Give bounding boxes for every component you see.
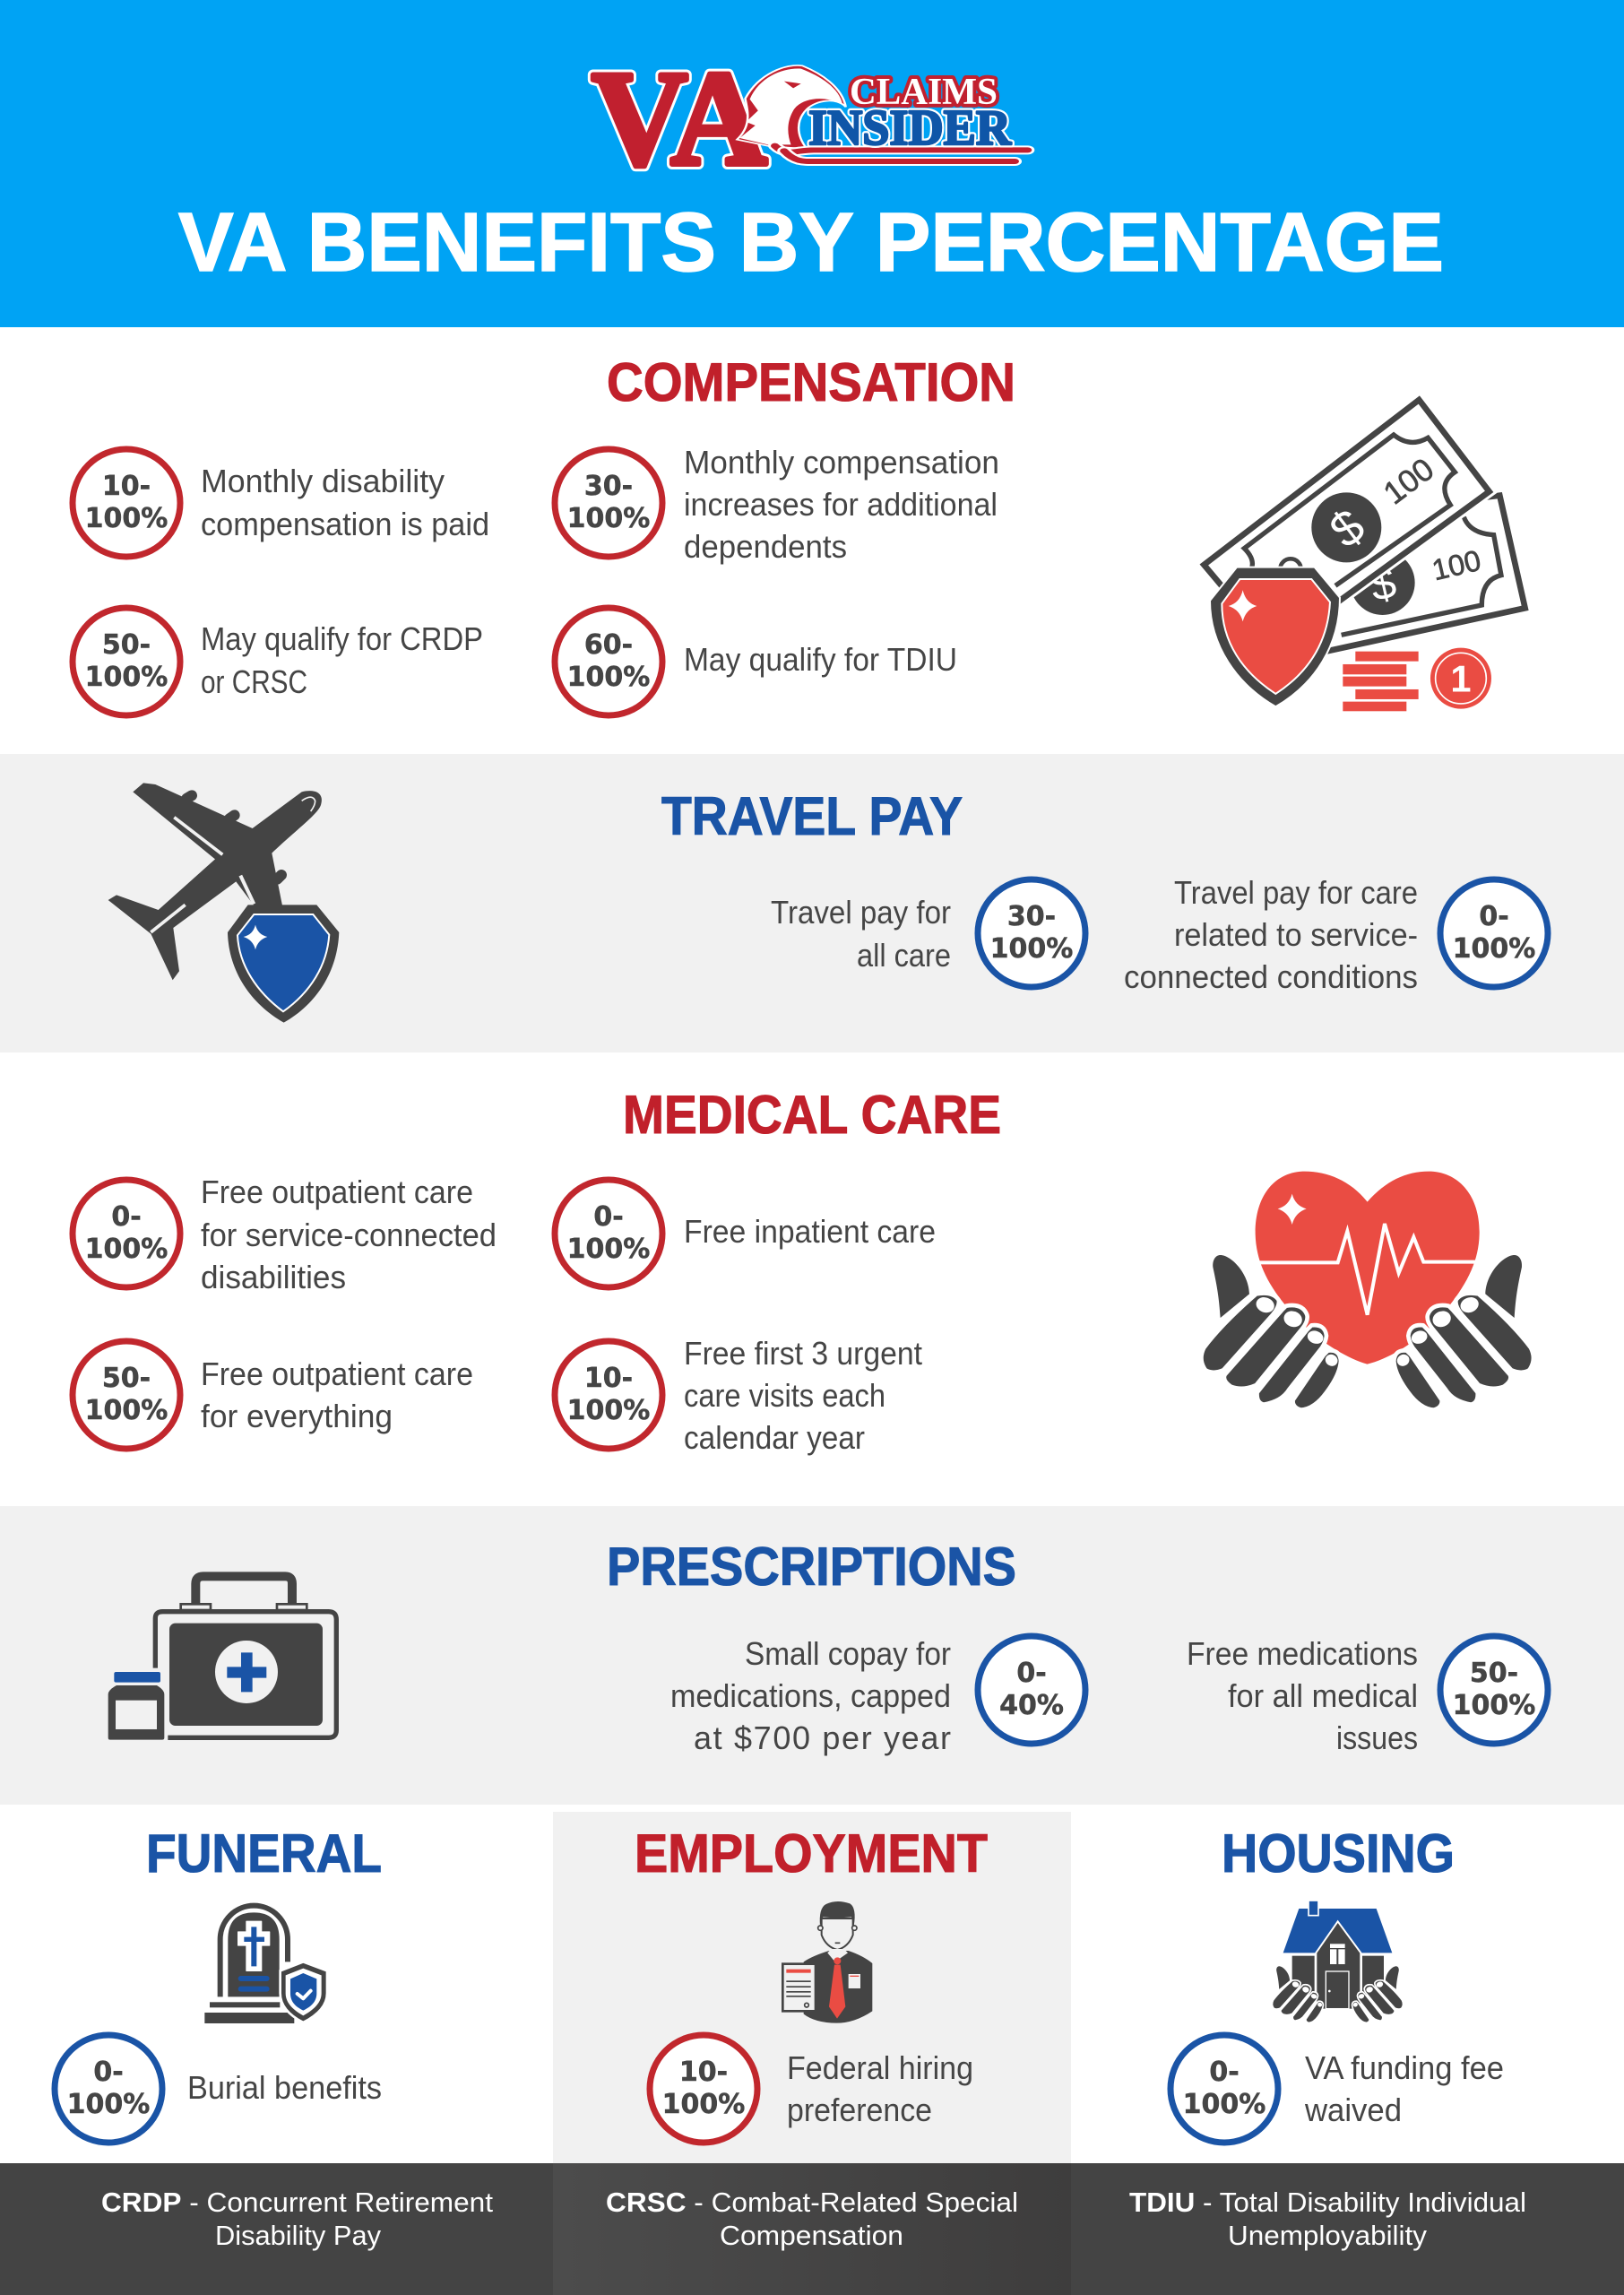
definition: CRDP: CRDP - Concurrent Retirement <box>101 2187 493 2218</box>
definition: CRDP <box>101 2187 493 2251</box>
item: 0-100% funding fee waived: 0- <box>1209 2057 1240 2088</box>
item: 0-100% free inpatient: 100% <box>567 1234 650 1265</box>
item: 0-100% free inpatient <box>555 1180 936 1287</box>
item: 50-100% free outpatient everything: Free outpatient care <box>201 1355 473 1392</box>
definition: CRSC: Compensation <box>720 2220 903 2251</box>
icon: house in hands <box>1272 1901 1404 2022</box>
item: 0-40% small copay: at $700 per year <box>694 1719 951 1756</box>
item: 30-100% dependents: dependents <box>684 528 847 565</box>
logo: VA Claims Insider: VA <box>592 43 767 194</box>
item: 0-100% burial benefits: 0- <box>93 2057 124 2088</box>
item: 10-100% urgent care: care visits each <box>684 1377 885 1414</box>
item: 50-100% CRDP or CRSC: May qualify for CRDP <box>201 620 483 657</box>
icon: hands holding heart <box>1201 1172 1533 1410</box>
header banner <box>0 0 1624 327</box>
item: 10-100% monthly disability: Monthly disability <box>201 463 445 499</box>
item: 50-100% free outpatient everything: for everything <box>201 1398 393 1434</box>
icon: tombstone with shield <box>204 1906 327 2023</box>
logo: VA Claims Insider: INSIDER <box>808 100 1012 156</box>
panel: prescriptions <box>0 1506 1624 1805</box>
item: 10-100% monthly disability: compensation is paid <box>201 506 489 542</box>
heading: funeral: FUNERAL <box>146 1823 382 1884</box>
item: 50-100% free outpatient everything: 50- <box>102 1363 151 1394</box>
logo: VA Claims Insider <box>592 43 1028 194</box>
definition: CRDP: Disability Pay <box>215 2220 381 2251</box>
icon: money with shield and coins: $ <box>1319 498 1375 559</box>
item: 0-40% small copay: Small copay for <box>745 1635 951 1672</box>
item: 0-100% free outpatient service-connected: disabilities <box>201 1259 346 1295</box>
item: 50-100% CRDP or CRSC: or CRSC <box>201 663 307 700</box>
item: 0-100% burial benefits <box>55 2035 382 2143</box>
item: 30-100% travel pay for all care: 100% <box>990 933 1073 965</box>
panel: employment <box>553 1812 1071 2163</box>
item: 10-100% urgent care <box>555 1335 922 1456</box>
item: 0-100% funding fee waived: 100% <box>1183 2089 1266 2120</box>
item: 0-100% service-connected travel <box>1124 874 1548 995</box>
logo: VA Claims Insider: INSIDER <box>808 100 1012 156</box>
item: 10-100% federal hiring: preference <box>787 2091 932 2128</box>
definition: CRSC: CRSC - Combat-Related Special <box>606 2187 1018 2218</box>
item: 50-100% free medications: 50- <box>1470 1658 1518 1689</box>
item: 30-100% travel pay for all care <box>771 879 1085 987</box>
item: 30-100% travel pay for all care: all care <box>857 937 951 974</box>
logo: VA Claims Insider: VA <box>592 43 767 194</box>
item: 50-100% free medications: 100% <box>1453 1690 1535 1721</box>
icon: money with shield and coins <box>1204 400 1525 711</box>
icon: money with shield and coins: 100 <box>1378 452 1440 511</box>
item: 50-100% free medications: issues <box>1336 1719 1418 1756</box>
heading: housing: HOUSING <box>1222 1823 1455 1884</box>
item: 0-100% free outpatient service-connected: 100% <box>85 1234 168 1265</box>
item: 10-100% federal hiring <box>650 2035 973 2143</box>
icon: money with shield and coins: $ <box>1365 557 1401 611</box>
item: 10-100% monthly disability: 10- <box>102 471 151 502</box>
footer: acronym definitions <box>0 2163 1624 2295</box>
item: 10-100% federal hiring: 100% <box>662 2089 745 2120</box>
item: 60-100% TDIU: 60- <box>584 629 633 661</box>
item: 30-100% dependents: Monthly compensation <box>684 444 999 481</box>
item: 0-100% free inpatient: Free inpatient care <box>684 1213 936 1250</box>
item: 10-100% urgent care: 100% <box>567 1395 650 1426</box>
item: 30-100% travel pay for all care: 30- <box>1007 901 1056 932</box>
item: 50-100% free medications: Free medications <box>1187 1635 1418 1672</box>
heading: prescriptions: PRESCRIPTIONS <box>607 1537 1016 1597</box>
item: 0-100% free inpatient: 0- <box>593 1201 624 1233</box>
item: 0-100% funding fee waived: waived <box>1304 2091 1402 2128</box>
item: 60-100% TDIU <box>555 608 957 715</box>
item: 50-100% CRDP or CRSC <box>73 608 483 715</box>
item: 30-100% dependents: 30- <box>584 471 633 502</box>
panel: housing <box>1170 1823 1504 2143</box>
item: 30-100% dependents <box>555 444 999 565</box>
panel: compensation <box>73 352 1525 715</box>
item: 10-100% federal hiring: 10- <box>679 2057 728 2088</box>
item: 0-100% free outpatient service-connected: Free outpatient care <box>201 1173 473 1210</box>
heading: compensation: COMPENSATION <box>607 352 1015 412</box>
item: 0-40% small copay <box>670 1635 1085 1756</box>
definition: CRSC <box>606 2187 1018 2251</box>
item: 30-100% dependents: increases for additional <box>684 486 998 523</box>
item: 0-100% service-connected travel: related to service- <box>1174 916 1418 953</box>
item: 50-100% CRDP or CRSC: 50- <box>102 629 151 661</box>
heading: employment: EMPLOYMENT <box>635 1823 988 1884</box>
item: 0-100% funding fee waived <box>1170 2035 1504 2143</box>
panel: travel pay <box>0 754 1624 1052</box>
icon: airplane with shield <box>108 783 339 1023</box>
item: 10-100% federal hiring: Federal hiring <box>787 2049 973 2086</box>
item: 50-100% free outpatient everything: 100% <box>85 1395 168 1426</box>
item: 10-100% urgent care: calendar year <box>684 1419 865 1456</box>
item: 50-100% free medications: for all medical <box>1228 1677 1418 1714</box>
item: 10-100% urgent care: 10- <box>584 1363 633 1394</box>
item: 0-100% free outpatient service-connected: 0- <box>111 1201 142 1233</box>
logo: VA Claims Insider: CLAIMS <box>850 72 998 113</box>
item: 10-100% monthly disability <box>73 449 489 557</box>
item: 0-40% small copay: 0- <box>1016 1658 1047 1689</box>
item: 0-40% small copay: medications, capped <box>670 1677 951 1714</box>
item: 50-100% free outpatient everything <box>73 1341 473 1449</box>
item: 0-100% free outpatient service-connected: for service-connected <box>201 1217 497 1253</box>
definition: TDIU: TDIU - Total Disability Individual <box>1129 2187 1526 2218</box>
icon: money with shield and coins: 1 <box>1450 658 1472 700</box>
item: 0-100% burial benefits: Burial benefits <box>187 2069 382 2106</box>
icon: person with document <box>782 1901 872 2023</box>
panel: medical care <box>73 1085 1533 1456</box>
icon: money with shield and coins: 100 <box>1429 543 1484 586</box>
item: 50-100% CRDP or CRSC: 100% <box>85 662 168 693</box>
item: 30-100% dependents: 100% <box>567 503 650 534</box>
icon: medical kit and pill bottle <box>108 1576 336 1740</box>
item: 10-100% urgent care: Free first 3 urgent <box>684 1335 922 1372</box>
item: 0-100% funding fee waived: VA funding fee <box>1305 2049 1504 2086</box>
definition: TDIU: Unemployability <box>1228 2220 1427 2251</box>
heading: medical care: MEDICAL CARE <box>623 1085 1001 1145</box>
item: 60-100% TDIU: 100% <box>567 662 650 693</box>
item: 0-100% service-connected travel: Travel pay for care <box>1174 874 1418 911</box>
item: 0-100% free outpatient service-connected <box>73 1173 497 1295</box>
definition: TDIU <box>1129 2187 1526 2251</box>
title: VA BENEFITS BY PERCENTAGE <box>178 195 1444 289</box>
panel: funeral <box>55 1823 382 2143</box>
heading: travel pay: TRAVEL PAY <box>661 786 963 846</box>
item: 0-40% small copay: 40% <box>999 1690 1064 1721</box>
item: 0-100% service-connected travel: 100% <box>1453 933 1535 965</box>
item: 60-100% TDIU: May qualify for TDIU <box>684 641 957 678</box>
item: 30-100% travel pay for all care: Travel pay for <box>771 894 951 931</box>
item: 0-100% service-connected travel: 0- <box>1479 901 1509 932</box>
item: 0-100% service-connected travel: connected conditions <box>1124 958 1418 995</box>
item: 50-100% free medications <box>1187 1635 1548 1756</box>
item: 0-100% burial benefits: 100% <box>67 2089 150 2120</box>
item: 10-100% monthly disability: 100% <box>85 503 168 534</box>
